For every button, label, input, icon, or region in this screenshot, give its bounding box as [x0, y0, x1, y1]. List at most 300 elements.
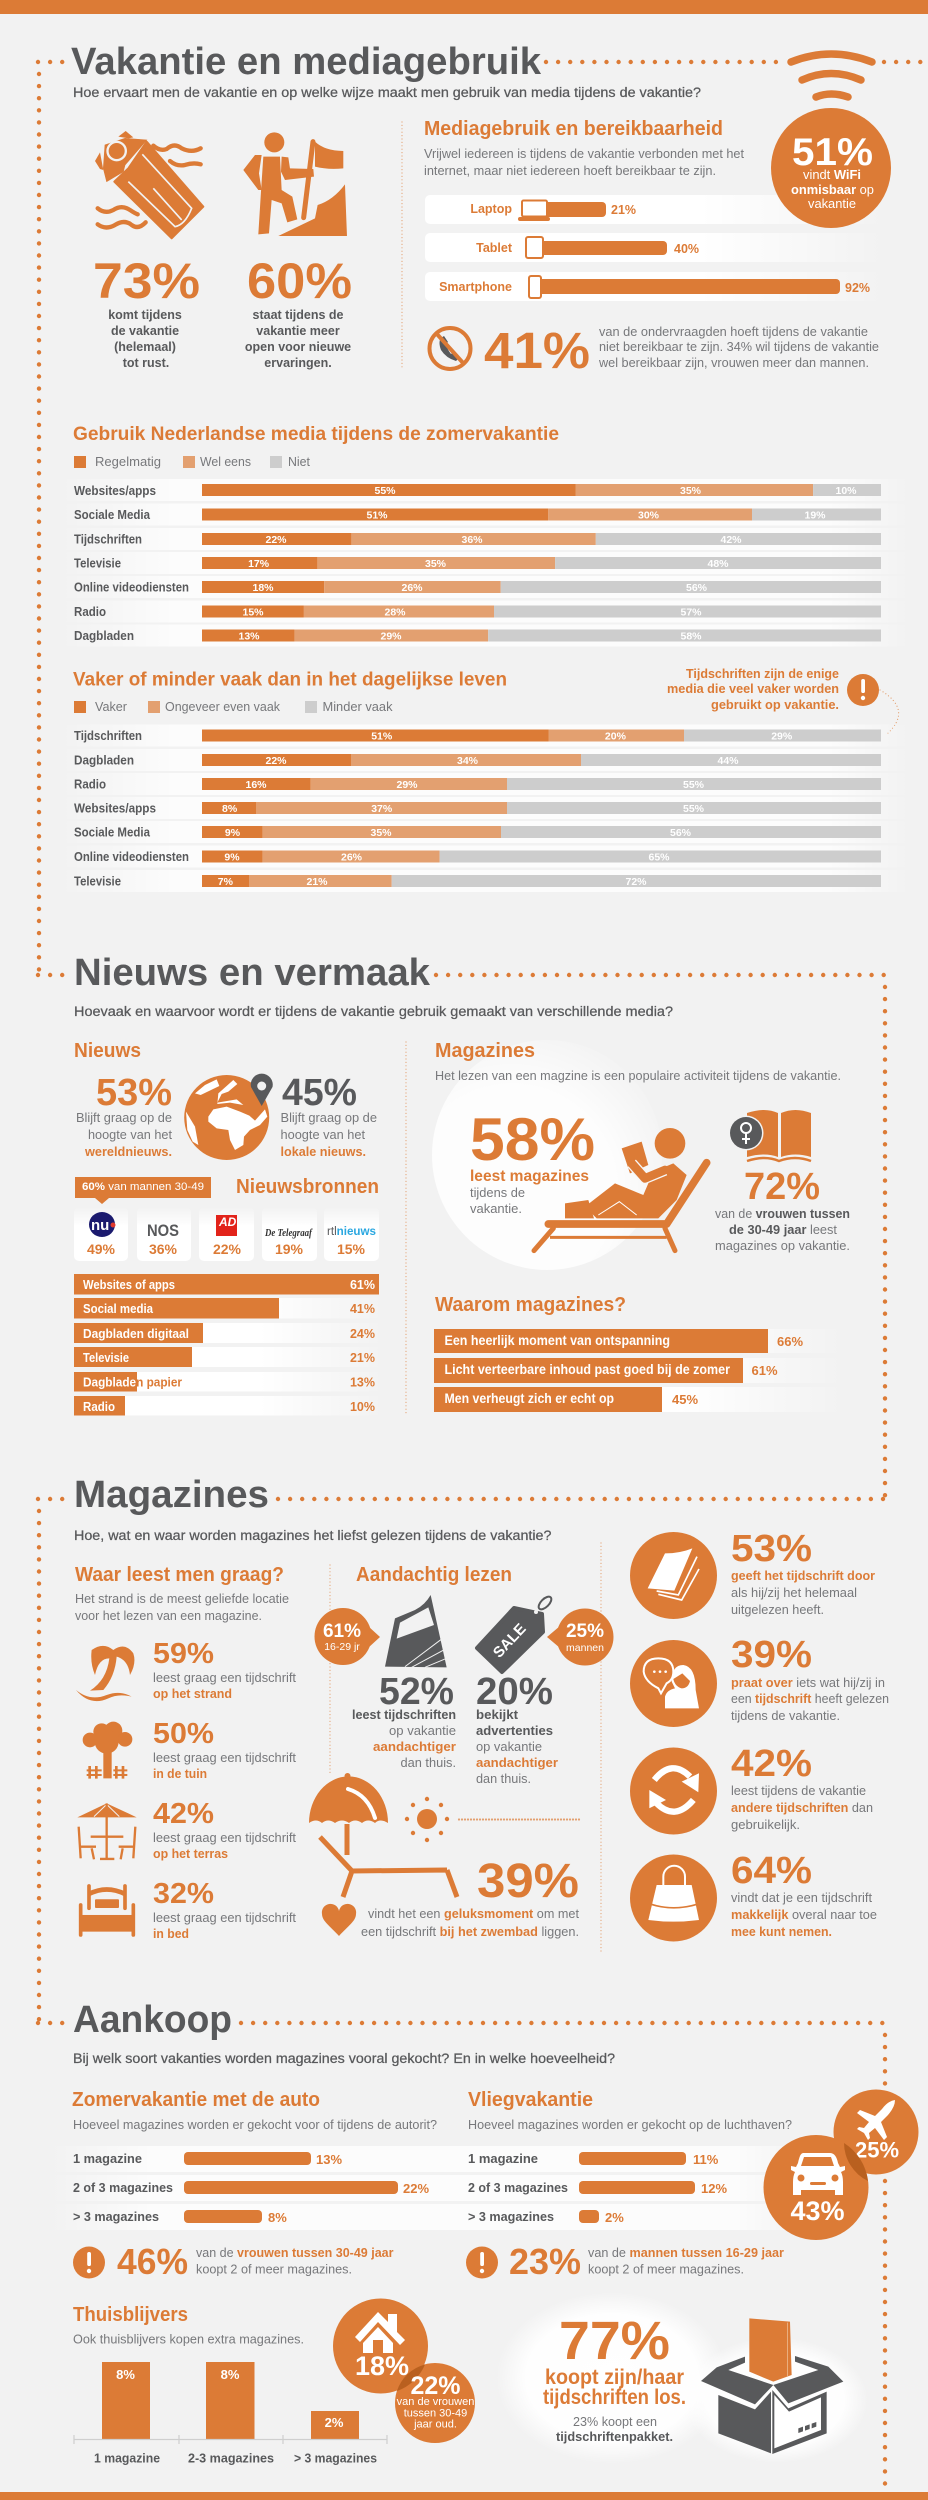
title: Vakantie en mediagebruik [71, 41, 542, 83]
Laptop row: 21% [611, 203, 636, 217]
text: question plane: Hoeveel magazines worden er gekocht op de luchthaven? [468, 2117, 792, 2132]
icon: tree with fence [83, 1722, 132, 1779]
bubble: 25% mannen: mannen [566, 1642, 604, 1654]
stat: 53% doorgeven: uitgelezen heeft. [731, 1602, 824, 1617]
heading: Thuisblijvers: Thuisblijvers [73, 2304, 188, 2326]
row: Online videodiensten: 65% [648, 852, 670, 864]
legend [74, 454, 310, 469]
bar: Websites of apps [74, 1274, 379, 1294]
heading: Vliegvakantie: Vliegvakantie [468, 2089, 593, 2111]
bubble: 61% 16-29 jr: 16-29 jr [324, 1641, 360, 1653]
stat: 52%: leest tijdschriften [352, 1708, 456, 1722]
stat: 53% doorgeven [630, 1528, 875, 1619]
bar: Televisie [74, 1347, 384, 1367]
Laptop row: Laptop [470, 202, 512, 216]
item: strand [76, 1638, 296, 1701]
icon: person on air mattress [95, 131, 203, 238]
icon: palm tree [76, 1646, 134, 1701]
stat: 58% [470, 1106, 595, 1216]
title: Magazines [74, 1474, 269, 1516]
bar: Radio: 10% [350, 1400, 375, 1414]
Tablet row: 40% [674, 242, 699, 256]
row: Dagbladen: 44% [717, 755, 739, 767]
bar chart: auto: 2 of 3 magazines [73, 2181, 173, 2195]
card: NOS [137, 1207, 191, 1261]
bar: Dagbladen digitaal: 24% [350, 1327, 375, 1341]
stat: 45% lokale nieuws: Blijft graag op de [280, 1110, 377, 1125]
row: Sociale Media: 51% [366, 510, 388, 522]
Smartphone row: 92% [845, 281, 870, 295]
white blobs behind 77% [496, 2292, 868, 2464]
row: Televisie: 7% [218, 876, 234, 888]
icon: exclamation mark [847, 674, 879, 706]
bar: Dagbladen digitaal [74, 1323, 384, 1343]
stat: 53% wereldnieuws [76, 1072, 172, 1159]
heading: Zomervakantie met de auto: Zomervakantie met de auto [72, 2089, 320, 2111]
stat: 39% praten [630, 1634, 889, 1727]
callout: 51% wifi: vakantie [808, 197, 856, 211]
row: Tijdschriften: 51% [371, 730, 393, 742]
bar chart: vlieg: 11% [693, 2152, 719, 2167]
bubble: 61% 16-29 jr [314, 1608, 380, 1665]
column chart: thuisblijvers: > 3 magazines [294, 2452, 377, 2466]
row: Sociale Media: 30% [638, 510, 660, 522]
item: terras: op het terras [153, 1846, 228, 1861]
stat: 64% makkelijk meenemen: 64% [731, 1850, 812, 1892]
row: Televisie [60, 552, 910, 574]
stat: 20%: dan thuis. [476, 1771, 531, 1786]
heading: Gebruik Nederlandse media tijdens de zomervakantie [73, 424, 559, 445]
stat: 64% makkelijk meenemen [630, 1850, 877, 1942]
icon: exclamation mark [466, 2246, 498, 2278]
Tablet row: Tablet [476, 241, 513, 255]
row: Websites/apps [60, 797, 910, 819]
row: Dagbladen: 58% [680, 630, 702, 642]
section: Aankoop [50, 1999, 918, 2466]
stat: 58%: tijdens de [470, 1185, 525, 1200]
intro text: Het lezen van een magzine is een populaire activiteit tijdens de vakantie. [435, 1068, 841, 1083]
stat: 39% praten: 39% [731, 1634, 812, 1676]
stat 41%: 41% [484, 322, 590, 379]
stat: 39% praten: tijdens de vakantie. [731, 1708, 840, 1723]
title: Aankoop [73, 1999, 232, 2041]
legend: Vaker [95, 699, 128, 714]
row: Websites/apps: 10% [835, 485, 857, 497]
row: Tijdschriften: 22% [265, 534, 287, 546]
row: Televisie [60, 870, 910, 892]
stat: 45% lokale nieuws: 45% [282, 1072, 357, 1114]
bar: Social media [74, 1298, 384, 1318]
stat: 64% makkelijk meenemen: vindt dat je een tijdschrift [731, 1890, 872, 1905]
bar: Websites of apps: 61% [350, 1278, 375, 1292]
item: strand: leest graag een tijdschrift [153, 1670, 296, 1685]
card: De Telegraaf [262, 1207, 317, 1261]
bar: verheugt: 45% [672, 1392, 698, 1407]
stat 73% [93, 253, 200, 370]
item: strand: op het strand [153, 1686, 232, 1701]
stat: 45% lokale nieuws: lokale nieuws. [280, 1144, 366, 1159]
column chart: thuisblijvers: 2% [325, 2415, 344, 2430]
callout: 23%: koopt 2 of meer magazines. [588, 2262, 744, 2276]
bar chart: vlieg: 2 of 3 magazines [468, 2181, 568, 2195]
icon: beach umbrella and chair [309, 1773, 457, 1897]
row: Tijdschriften [60, 724, 910, 746]
subtitle: Hoe ervaart men de vakantie en op welke wijze maakt men gebruik van media tijdens de vakantie? [73, 85, 701, 100]
legend [74, 699, 393, 714]
row: Radio: 28% [384, 606, 406, 618]
callout: tijdschriften [667, 666, 899, 735]
stat: 52%: 52% [379, 1671, 454, 1713]
stat: 58%: leest magazines [470, 1168, 589, 1185]
item: bed: in bed [153, 1926, 189, 1941]
news source logos [74, 1207, 379, 1261]
callout: 51% wifi [771, 108, 891, 228]
icon: magazine [385, 1595, 447, 1667]
bar: Dagbladen papier: Dagbladen papier [83, 1376, 182, 1390]
stat: 42% andere tijdschriften [630, 1743, 873, 1834]
row: Sociale Media [60, 504, 910, 526]
bar: Televisie: Televisie [83, 1351, 129, 1365]
stat: 64% makkelijk meenemen: mee kunt nemen. [731, 1924, 832, 1939]
bar: verteerbare inhoud: 61% [752, 1363, 778, 1378]
icon: handbag [630, 1854, 717, 1942]
row: Websites/apps [60, 479, 910, 501]
stat 41%: van de ondervraagden hoeft tijdens de vakantie [599, 324, 868, 339]
title: Nieuws en vermaak [74, 952, 431, 994]
stat: 72%: van de vrouwen tussen [715, 1206, 850, 1221]
bar chart: vlieg: > 3 magazines [468, 2210, 554, 2224]
item: terras [77, 1798, 296, 1861]
stat: 77%: 23% koopt een [573, 2414, 657, 2429]
row: Televisie: Televisie [74, 874, 121, 888]
row: Sociale Media [60, 821, 910, 843]
stat: 58%: 58% [470, 1106, 595, 1173]
bar chart: auto: 22% [403, 2181, 429, 2196]
stat: 52%: dan thuis. [400, 1755, 456, 1770]
stat: 20% [476, 1671, 558, 1786]
bar: Dagbladen papier [74, 1372, 384, 1392]
icon: refresh arrows [630, 1748, 717, 1834]
heading: Waarom magazines?: Waarom magazines? [435, 1294, 626, 1316]
row: Tijdschriften: 20% [605, 730, 627, 742]
icon: person reading on lounger [534, 1128, 707, 1251]
stat: 42% andere tijdschriften: gebruikelijk. [731, 1817, 800, 1832]
bar: ontspanning [434, 1329, 844, 1353]
row: Tijdschriften: 42% [720, 534, 742, 546]
intro text: Het strand is de meest geliefde locatie [75, 1591, 289, 1606]
icon: box with magazine [701, 2318, 843, 2454]
stat: 53% doorgeven: 53% [731, 1528, 812, 1570]
row: Online videodiensten: 9% [224, 852, 240, 864]
stat: 39%: vindt het een geluksmoment om met [368, 1906, 579, 1921]
bottom bar [0, 2492, 928, 2500]
card: AD [199, 1207, 254, 1261]
item: tuin: leest graag een tijdschrift [153, 1750, 296, 1765]
column chart: thuisblijvers: 1 magazine [94, 2452, 160, 2466]
row: Radio [60, 773, 910, 795]
stat: 52%: aandachtiger [373, 1739, 456, 1754]
row: Sociale Media: 35% [370, 827, 392, 839]
card: NOS: NOS [147, 1221, 179, 1240]
callout: 51% wifi: onmisbaar op [791, 183, 874, 197]
stat 60%: ervaringen. [264, 356, 332, 370]
item: tuin: 50% [153, 1718, 214, 1750]
circle: car 43%: 43% [790, 2196, 845, 2226]
card: RTL Nieuws: 15% [337, 1241, 366, 1257]
text: thuisblijvers: Ook thuisblijvers kopen extra magazines. [73, 2332, 304, 2346]
stat: 42% andere tijdschriften: andere tijdschriften dan [731, 1800, 873, 1815]
stat: 53% doorgeven: geeft het tijdschrift door [731, 1568, 875, 1583]
row: Radio: 55% [683, 779, 705, 791]
stat: 77%: tijdschriften los. [543, 2386, 686, 2409]
stat: 53% wereldnieuws: 53% [96, 1072, 172, 1114]
bar chart: waarom magazines [434, 1329, 844, 1412]
section: Nieuws en vermaak [74, 952, 850, 1416]
stat: 58%: vakantie. [470, 1201, 522, 1216]
row: Televisie: Televisie [74, 556, 121, 570]
row: Sociale Media: 19% [804, 510, 826, 522]
card: RTL Nieuws [324, 1207, 379, 1261]
row: Dagbladen [60, 749, 910, 771]
legend: Ongeveer even vaak [165, 699, 280, 714]
stat 60%: staat tijdens de [252, 308, 344, 322]
heading: Nieuws: Nieuws [74, 1040, 141, 1062]
stat: 20%: 20% [476, 1671, 553, 1713]
row: Televisie: 21% [306, 876, 328, 888]
card: NU.nl: 49% [87, 1241, 116, 1257]
row: Tijdschriften: Tijdschriften [74, 729, 142, 743]
item: tuin: in de tuin [153, 1766, 207, 1781]
stat: 72%: 72% [744, 1166, 820, 1208]
stat: 39% praten: een tijdschrift heeft gelezen [731, 1691, 889, 1706]
stat: 45% lokale nieuws: hoogte van het [280, 1127, 365, 1142]
circle: 22% vrouwen: van de vrouwen [397, 2396, 474, 2408]
stat: 20%: op vakantie [476, 1739, 542, 1754]
row: Dagbladen: 13% [238, 630, 260, 642]
icon: bed [80, 1886, 133, 1935]
icon: exclamation mark [73, 2246, 105, 2278]
stat: 53% wereldnieuws: hoogte van het [88, 1127, 172, 1142]
white rows behind purchase bars [50, 2146, 810, 2230]
row: Radio: Radio [74, 778, 106, 792]
section: Vakantie en mediagebruik [71, 41, 891, 379]
stat: 52%: op vakantie [389, 1723, 456, 1738]
card: AD: AD [218, 1215, 237, 1229]
bar: verteerbare inhoud: Licht verteerbare inhoud past goed bij de zomer [444, 1362, 731, 1377]
intro text [75, 1591, 289, 1623]
bar chart: news channels [74, 1274, 384, 1416]
row: Televisie: 72% [625, 876, 647, 888]
bar: Televisie: 21% [350, 1351, 375, 1365]
stat: 42% andere tijdschriften: leest tijdens de vakantie [731, 1783, 866, 1798]
row: Online videodiensten: 26% [341, 852, 363, 864]
card: NU.nl: nu [91, 1217, 109, 1234]
bar: Dagbladen digitaal: Dagbladen digitaal [83, 1327, 189, 1341]
stat 60%: open voor nieuwe [245, 340, 351, 354]
stat: 20%: advertenties [476, 1724, 553, 1738]
column chart: thuisblijvers: 2-3 magazines [188, 2452, 274, 2466]
stat: 20%: aandachtiger [476, 1755, 558, 1770]
callout: 23%: 23% [509, 2241, 581, 2282]
row: Radio: 29% [396, 779, 418, 791]
bar: Social media: 41% [350, 1302, 375, 1316]
Laptop row [470, 200, 636, 221]
stat 73%: komt tijdens [108, 308, 182, 322]
card: AD: 22% [213, 1241, 242, 1257]
row: Sociale Media: Sociale Media [74, 508, 151, 522]
row: Websites/apps: 55% [683, 803, 705, 815]
callout: tijdschriften: Tijdschriften zijn de enige [686, 666, 839, 681]
callout: 46%: koopt 2 of meer magazines. [196, 2262, 352, 2276]
bar chart: auto: 8% [268, 2210, 287, 2225]
circle: house 18%: 18% [355, 2351, 409, 2381]
item: bed: leest graag een tijdschrift [153, 1910, 296, 1925]
stat 60%: vakantie meer [256, 324, 340, 338]
callout: 60% van mannen: 60% van mannen 30-49 [82, 1181, 204, 1193]
circle: 22% vrouwen: tussen 30-49 [404, 2408, 467, 2420]
callout: 23% [466, 2241, 784, 2282]
legend: Niet [288, 454, 310, 469]
stat: 39% praten: praat over iets wat hij/zij in [731, 1675, 885, 1690]
bar: verteerbare inhoud [434, 1358, 844, 1383]
row: Dagbladen: Dagbladen [74, 754, 134, 768]
icon: open book with female symbol [728, 1110, 811, 1161]
callout: 23%: van de mannen tussen 16-29 jaar [588, 2245, 784, 2260]
row: Dagbladen: Dagbladen [74, 629, 134, 643]
row: Tijdschriften: Tijdschriften [74, 532, 142, 546]
icon: sale tag [477, 1595, 553, 1672]
stat: 45% lokale nieuws [280, 1072, 377, 1159]
text: question car: Hoeveel magazines worden er gekocht voor of tijdens de autorit? [73, 2117, 437, 2132]
intro text: Vrijwel iedereen is tijdens de vakantie verbonden met het [424, 146, 744, 161]
stat 73%: (helemaal) [114, 340, 176, 354]
row: Radio [60, 600, 910, 622]
bar: verheugt [434, 1387, 844, 1412]
row: Dagbladen: 22% [265, 755, 287, 767]
item: bed [80, 1878, 296, 1941]
stat: 72%: de 30-49 jaar leest [729, 1222, 837, 1237]
row: Tijdschriften: 29% [771, 730, 793, 742]
row: Tijdschriften [60, 528, 910, 550]
row: Websites/apps: 55% [374, 485, 396, 497]
stat: 72%: magazines op vakantie. [715, 1238, 850, 1253]
bar: Radio: Radio [83, 1400, 115, 1414]
circle: plane 25%: 25% [855, 2138, 899, 2162]
callout: 46%: 46% [117, 2241, 188, 2282]
heading: Vaker of minder vaak dan in het dagelijkse leven [73, 670, 507, 690]
stat 73%: de vakantie [111, 324, 179, 338]
heading: Mediagebruik en bereikbaarheid: Mediagebruik en bereikbaarheid [424, 118, 723, 140]
bubble: 61% 16-29 jr: 61% [323, 1621, 361, 1642]
icon: globe with map pin [184, 1074, 273, 1160]
circle: 22% vrouwen: 22% [410, 2372, 461, 2400]
icon: person with speech bubble [630, 1640, 717, 1727]
bar chart: vlieg: 1 magazine [468, 2152, 538, 2166]
stat: 42% andere tijdschriften: 42% [731, 1743, 812, 1785]
subtitle: Hoevaak en waarvoor wordt er tijdens de vakantie gebruik gemaakt van verschillende media? [74, 1004, 673, 1019]
row: Online videodiensten: Online videodiensten [74, 850, 189, 864]
card: NU.nl [74, 1207, 128, 1261]
Tablet row [476, 237, 699, 258]
callout: 60% van mannen [75, 1177, 211, 1204]
callout: 51% wifi: vindt WiFi [803, 168, 861, 182]
heading: Waar leest men graag?: Waar leest men graag? [75, 1564, 284, 1586]
subtitle: Bij welk soort vakanties worden magazines vooral gekocht? En in welke hoeveelheid? [73, 2051, 615, 2066]
row: Radio: 15% [242, 606, 264, 618]
card: NOS: 36% [149, 1241, 178, 1257]
row: Dagbladen: 29% [380, 630, 402, 642]
row: Radio: 16% [245, 779, 267, 791]
stat: 20%: bekijkt [476, 1708, 519, 1722]
stat: 39% [361, 1855, 579, 1939]
item: terras: 42% [153, 1798, 214, 1830]
intro text [424, 146, 744, 178]
row: Radio: 57% [680, 606, 702, 618]
bar chart: auto: 1 magazine [73, 2152, 142, 2166]
item: bed: 32% [153, 1878, 214, 1910]
row: Websites/apps: 37% [371, 803, 393, 815]
card: De Telegraaf: De Telegraaf [264, 1227, 313, 1239]
bar: ontspanning: Een heerlijk moment van ontspanning [444, 1333, 670, 1348]
row: Online videodiensten: 26% [401, 582, 423, 594]
row: Websites/apps: 8% [222, 803, 238, 815]
row: Dagbladen: 34% [457, 755, 479, 767]
callout: tijdschriften: media die veel vaker worden [667, 681, 839, 696]
bar chart: vlieg: 2% [605, 2210, 624, 2225]
icon: sale tag: SALE [490, 1621, 530, 1661]
card: De Telegraaf: 19% [275, 1241, 304, 1257]
stat: 77%: koopt zijn/haar [545, 2366, 684, 2389]
stacked bar chart [60, 479, 910, 646]
row: Sociale Media: Sociale Media [74, 826, 151, 840]
heading: Magazines: Magazines [435, 1040, 535, 1062]
icon: terrace table with umbrella [77, 1803, 137, 1859]
bubble: 25% mannen [547, 1608, 614, 1666]
icon: hiker with flag [243, 132, 347, 236]
stat 73%: tot rust. [123, 356, 169, 370]
stat 60% [245, 253, 352, 370]
row: Online videodiensten: 56% [686, 582, 708, 594]
bar: Radio [74, 1396, 384, 1416]
stat 41%: wel bereikbaar zijn, vrouwen meer dan mannen. [598, 355, 869, 370]
row: Televisie: 35% [425, 558, 447, 570]
row: Tijdschriften: 36% [461, 534, 483, 546]
item: strand: 59% [153, 1638, 214, 1670]
stat: 53% doorgeven: als hij/zij het helemaal [731, 1585, 857, 1600]
row: Websites/apps: Websites/apps [74, 484, 156, 498]
panel: Gebruik Nederlandse media tijdens de zomervakantie [60, 424, 910, 646]
intro text: internet, maar niet iedereen hoeft bereikbaar te zijn. [424, 163, 716, 178]
Smartphone row: Smartphone [439, 280, 512, 294]
bar chart: auto: 13% [316, 2152, 342, 2167]
bar chart: auto [73, 2152, 429, 2225]
item: tuin [83, 1718, 296, 1781]
top bar [0, 0, 928, 14]
row: Online videodiensten: Online videodiensten [74, 580, 189, 594]
bar chart: vlieg [468, 2152, 727, 2225]
row: Websites/apps: Websites/apps [74, 802, 156, 816]
circle: 22% vrouwen [395, 2363, 475, 2443]
Smartphone row [439, 276, 870, 298]
stat: 77%: 77% [559, 2311, 670, 2371]
row: Sociale Media: 9% [225, 827, 241, 839]
legend: Wel eens [200, 454, 251, 469]
icon: heart [322, 1904, 356, 1936]
row: Online videodiensten: 18% [252, 582, 274, 594]
bar: Dagbladen papier: 13% [350, 1376, 375, 1390]
background circle [432, 1040, 662, 1270]
intro text: voor het lezen van een magazine. [75, 1608, 262, 1623]
